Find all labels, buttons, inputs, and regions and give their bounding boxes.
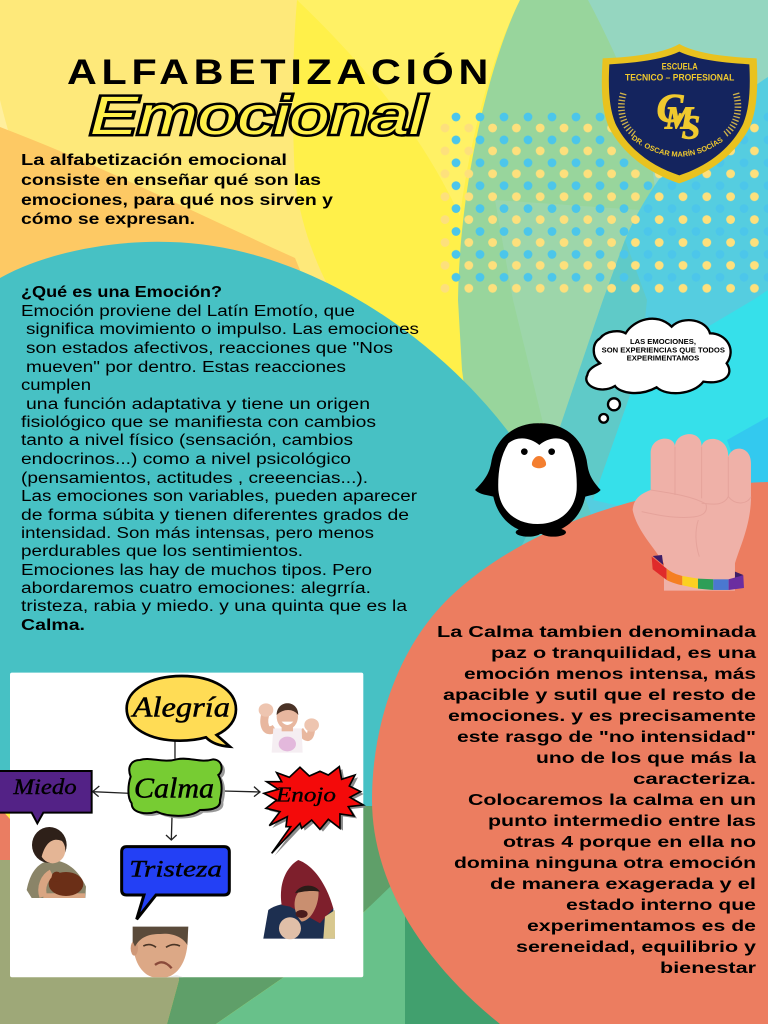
- burst bubble: Enojo: [264, 767, 366, 856]
- photo: angry boy in hood: [263, 860, 335, 939]
- photo: happy girl: [259, 703, 319, 753]
- cloud bubble: Calma: Calma: [134, 773, 214, 804]
- text: calm description: emoción menos intensa, más: [464, 666, 756, 683]
- text: what is an emotion: intensidad. Son más intensas, pero menos: [21, 525, 374, 542]
- text: calm description: domina ninguna otra emoción: [454, 855, 756, 872]
- icon: penguin: [475, 423, 601, 537]
- dot pattern: blue: [450, 111, 768, 283]
- speech bubble: Alegría: Alegría: [130, 693, 230, 724]
- text: calm description: otras 4 porque en ella no: [503, 834, 756, 851]
- text: what is an emotion: tristeza, rabia y miedo. y una quinta que es la: [21, 598, 407, 615]
- intro text: La alfabetización emocional: [21, 152, 287, 169]
- school shield logo: DR. OSCAR MARÍN SOCÍAS: [632, 135, 723, 157]
- text: what is an emotion: abordaremos cuatro emociones: alegrría.: [21, 580, 371, 597]
- text: what is an emotion: endocrinos...) como a nivel psicológico: [21, 451, 351, 468]
- text: what is an emotion: [21, 284, 419, 634]
- panel: emotion diagram: [0, 673, 366, 978]
- school shield logo: M: [664, 100, 695, 135]
- text: calm description: La Calma tambien denominada: [437, 624, 756, 641]
- school shield logo: TECNICO – PROFESIONAL: [625, 73, 735, 83]
- text: calm description: estado interno que: [566, 897, 756, 914]
- photo: boy with teddy bear: [27, 827, 86, 898]
- text: calm description: emociones. y es precisamente: [448, 708, 756, 725]
- cloud bubble: Calma: [128, 759, 225, 818]
- icon: raised fist with rainbow wristband: [633, 434, 751, 591]
- text: calm description: apacible y sutil que el resto de: [443, 687, 756, 704]
- text: what is an emotion: son estados afectivos, reacciones que "Nos: [26, 340, 393, 357]
- school shield logo: C: [657, 86, 685, 131]
- title: ALFABETIZACIÓN: [67, 52, 493, 92]
- text: calm description: bienestar: [660, 960, 756, 977]
- text: calm description: [437, 624, 756, 977]
- lower background shapes: [0, 806, 560, 1024]
- text: what is an emotion: significa movimiento o impulso. Las emociones: [26, 321, 419, 338]
- text: what is an emotion: Emociones las hay de muchos tipos. Pero: [21, 562, 372, 579]
- intro text: [21, 152, 333, 228]
- intro text: emociones, para qué nos sirven y: [21, 192, 333, 209]
- text: calm description: Colocaremos la calma en un: [468, 792, 756, 809]
- text: calm description: sereneidad, equilibrio y: [516, 939, 756, 956]
- text: what is an emotion: mueven" por dentro. Estas reacciones: [26, 359, 346, 376]
- text: calm description: punto intermedio entre las: [488, 813, 756, 830]
- teal circle: [0, 242, 533, 812]
- text: calm description: este rasgo de "no intensidad": [457, 729, 756, 746]
- thought bubble: LAS EMOCIONES,: [630, 339, 696, 346]
- text: what is an emotion: (pensamientos, actitudes , creeencias...).: [21, 470, 368, 487]
- connectors and arrows: [93, 740, 260, 840]
- coral circle: [372, 482, 768, 1024]
- school shield logo: ESCUELA: [662, 61, 698, 71]
- school shield logo: S: [682, 109, 700, 146]
- subtitle: Emocional: Emocional: [90, 86, 428, 146]
- speech bubble: Tristeza: [122, 847, 229, 919]
- text: calm description: paz o tranquilidad, es una: [491, 645, 756, 662]
- photo: sad boy: [131, 927, 188, 978]
- text: calm description: de manera exagerada y el: [490, 876, 756, 893]
- text: what is an emotion: Emoción proviene del Latín Emotío, que: [21, 303, 355, 320]
- text: what is an emotion: Calma.: [21, 617, 85, 634]
- text: what is an emotion: ¿Qué es una Emoción?: [21, 284, 222, 301]
- text: what is an emotion: cumplen: [21, 377, 91, 394]
- text: what is an emotion: Las emociones son variables, pueden aparecer: [21, 488, 417, 505]
- text: what is an emotion: fisiológico que se manifiesta con cambios: [21, 414, 376, 431]
- text: what is an emotion: una función adaptativa y tiene un origen: [26, 396, 370, 413]
- intro text: consiste en enseñar qué son las: [21, 172, 321, 189]
- thought bubble: [586, 319, 731, 423]
- text: calm description: uno de los que más la: [536, 750, 756, 767]
- intro text: cómo se expresan.: [21, 211, 195, 228]
- burst bubble: Enojo: Enojo: [275, 783, 336, 807]
- speech bubble: Tristeza: Tristeza: [129, 857, 222, 883]
- text: what is an emotion: perdurables que los sentimientos.: [21, 543, 303, 560]
- speech bubble: Miedo: Miedo: [12, 774, 77, 799]
- school shield logo: [602, 44, 758, 184]
- text: calm description: caracteriza.: [633, 771, 756, 788]
- speech bubble: Miedo: [0, 771, 92, 823]
- text: what is an emotion: de forma súbita y tienen diferentes grados de: [21, 507, 409, 524]
- speech bubble: Alegría: [127, 676, 236, 747]
- dot pattern: yellow: [440, 122, 768, 294]
- thought bubble: EXPERIMENTAMOS: [627, 356, 700, 363]
- thought bubble: SON EXPERIENCIAS QUE TODOS: [602, 348, 725, 355]
- text: calm description: experimentamos es de: [527, 918, 756, 935]
- text: what is an emotion: tanto a nivel físico (sensación, cambios: [21, 432, 353, 449]
